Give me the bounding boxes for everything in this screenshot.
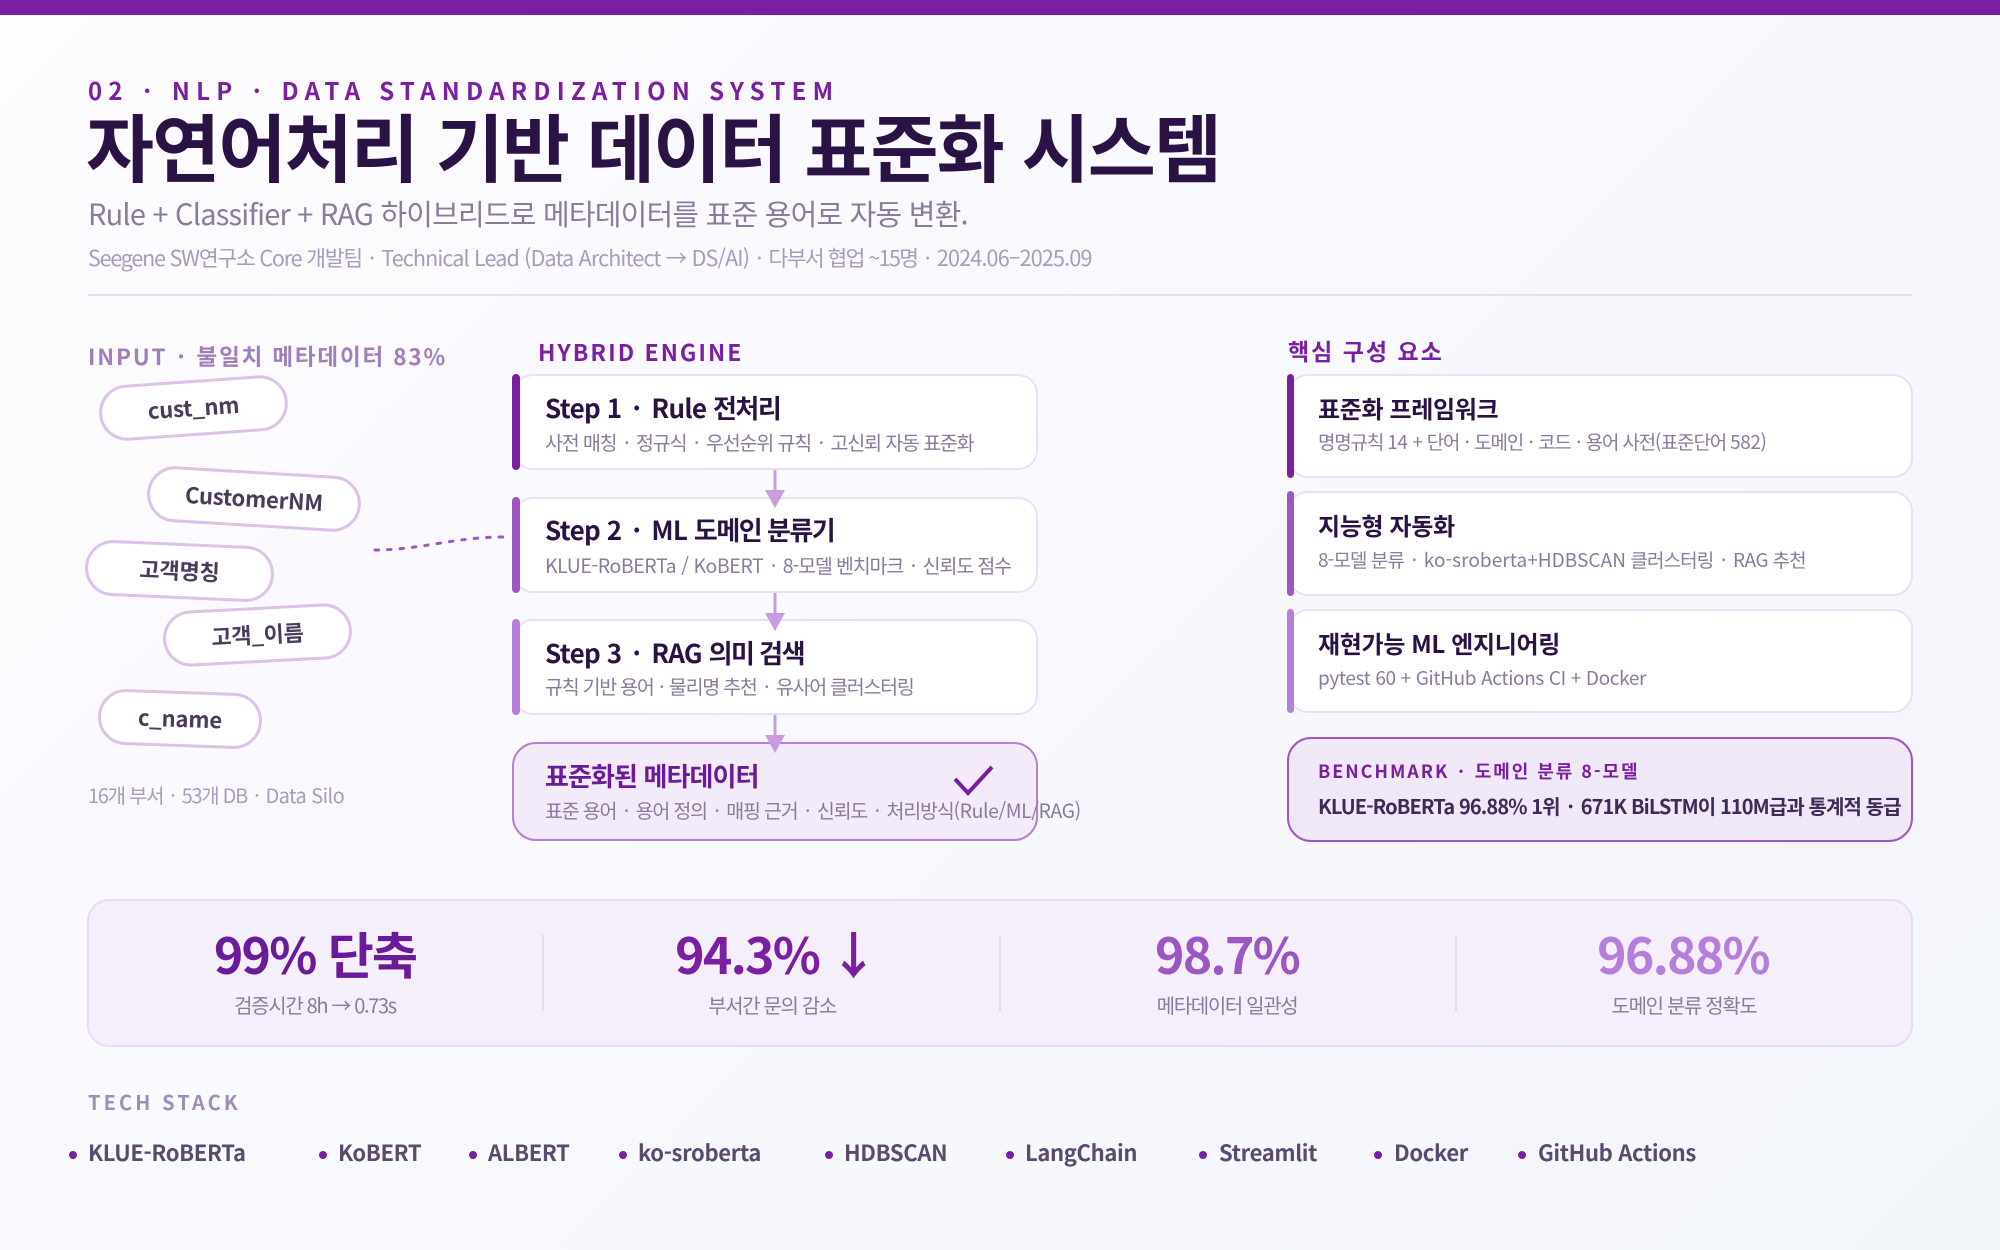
meta line: Seegene SW연구소 Core 개발팀 · Technical Lead (Data Architect → DS/AI) · 다부서 협업 ~15명 · 2024.06–2025.09 xyxy=(88,242,1092,273)
step 1 card: 사전 매칭 · 정규식 · 우선순위 규칙 · 고신뢰 자동 표준화 xyxy=(545,427,973,456)
arrow: step 2 to 3 xyxy=(765,593,785,631)
pill: 고객명칭: 고객명칭 xyxy=(139,552,220,588)
tech list: Docker xyxy=(1394,1136,1468,1168)
pill: cust_nm: cust_nm xyxy=(147,388,240,426)
component 2: 8-모델 분류 · ko-sroberta+HDBSCAN 클러스터링 · RAG 추천 xyxy=(1318,546,1806,573)
arrow: step 1 to 2 xyxy=(765,470,785,508)
step 1 card: Step 1 · Rule 전처리 xyxy=(545,389,780,426)
panel: KPI strip xyxy=(87,899,1913,1047)
panel: hybrid engine xyxy=(512,334,1081,841)
tech list xyxy=(69,1136,1696,1168)
step 2 card xyxy=(512,497,1038,593)
step 3 card: Step 3 · RAG 의미 검색 xyxy=(545,634,804,671)
tech list: KLUE-RoBERTa xyxy=(88,1136,246,1168)
tech stack section xyxy=(69,1087,1696,1168)
KPI 4: 96.88% xyxy=(1597,917,1769,989)
KPI 3: 메타데이터 일관성 xyxy=(1157,990,1297,1019)
step 2 card: Step 2 · ML 도메인 분류기 xyxy=(545,511,834,548)
step 2 card: KLUE-RoBERTa / KoBERT · 8-모델 벤치마크 · 신뢰도 점수 xyxy=(545,550,1011,579)
step 3 card xyxy=(512,619,1038,715)
tech list: Streamlit xyxy=(1219,1136,1317,1168)
components heading: 핵심 구성 요소 xyxy=(1288,333,1444,367)
component 2: 지능형 자동화 xyxy=(1318,507,1455,542)
caption: 16개 부서 · 53개 DB · Data Silo xyxy=(88,780,344,809)
arrow: step 3 to result xyxy=(765,715,785,753)
KPI 2: 부서간 문의 감소 xyxy=(708,990,836,1019)
result card xyxy=(512,742,1081,841)
step 1 card xyxy=(512,374,1038,470)
component 3 xyxy=(1287,609,1913,713)
component 1 xyxy=(1287,374,1913,478)
header block xyxy=(86,72,1912,296)
KPI 1: 검증시간 8h → 0.73s xyxy=(234,990,396,1019)
KPI 3: 98.7% xyxy=(1155,917,1299,989)
top accent bar xyxy=(0,0,2000,15)
tech list: ALBERT xyxy=(488,1136,570,1168)
benchmark callout: BENCHMARK · 도메인 분류 8-모델 xyxy=(1318,758,1639,784)
KPI 2: 94.3% ↓ xyxy=(675,917,877,989)
pill: 고객_이름: 고객_이름 xyxy=(210,616,304,652)
engine heading: HYBRID ENGINE xyxy=(538,334,743,368)
pill: c_name xyxy=(97,688,263,750)
tech list: HDBSCAN xyxy=(844,1136,947,1168)
tech list: KoBERT xyxy=(338,1136,421,1168)
input heading: INPUT · 불일치 메타데이터 83% xyxy=(88,340,447,372)
component 2 xyxy=(1287,491,1913,596)
tech list: LangChain xyxy=(1025,1136,1137,1168)
tech list: GitHub Actions xyxy=(1538,1136,1696,1168)
pill: 고객_이름 xyxy=(162,602,353,668)
KPI 1: 99% 단축 xyxy=(214,917,416,989)
benchmark callout: KLUE-RoBERTa 96.88% 1위 · 671K BiLSTM이 110M급과 통계적 동급 xyxy=(1318,791,1901,820)
pill: 고객명칭 xyxy=(84,539,275,603)
pill: c_name: c_name xyxy=(138,701,223,735)
component 1: 명명규칙 14 + 단어 · 도메인 · 코드 · 용어 사전(표준단어 582) xyxy=(1318,428,1766,455)
component 3: 재현가능 ML 엔지니어링 xyxy=(1318,625,1560,660)
tech stack heading: TECH STACK xyxy=(88,1087,241,1116)
panel: input metadata xyxy=(85,340,504,809)
step 3 card: 규칙 기반 용어 · 물리명 추천 · 유사어 클러스터링 xyxy=(545,671,914,700)
pill: CustomerNM xyxy=(146,465,362,533)
result card: 표준 용어 · 용어 정의 · 매핑 근거 · 신뢰도 · 처리방식(Rule/ML/RAG) xyxy=(545,795,1081,824)
KPI 4: 도메인 분류 정확도 xyxy=(1612,990,1756,1019)
subtitle: Rule + Classifier + RAG 하이브리드로 메타데이터를 표준 용어로 자동 변환. xyxy=(88,192,968,234)
tech list: ko-sroberta xyxy=(638,1136,761,1168)
component 3: pytest 60 + GitHub Actions CI + Docker xyxy=(1318,664,1646,691)
icon: check mark xyxy=(954,766,994,796)
pill: CustomerNM: CustomerNM xyxy=(184,478,324,518)
component 1: 표준화 프레임워크 xyxy=(1318,390,1498,425)
panel: core components xyxy=(1287,333,1913,842)
benchmark callout xyxy=(1287,737,1913,842)
dotted connector xyxy=(374,536,504,552)
eyebrow: 02 · NLP · DATA STANDARDIZATION SYSTEM xyxy=(88,72,839,107)
pill: cust_nm xyxy=(97,373,290,443)
result card: 표준화된 메타데이터 xyxy=(545,757,759,794)
title: 자연어처리 기반 데이터 표준화 시스템 xyxy=(86,91,1220,198)
